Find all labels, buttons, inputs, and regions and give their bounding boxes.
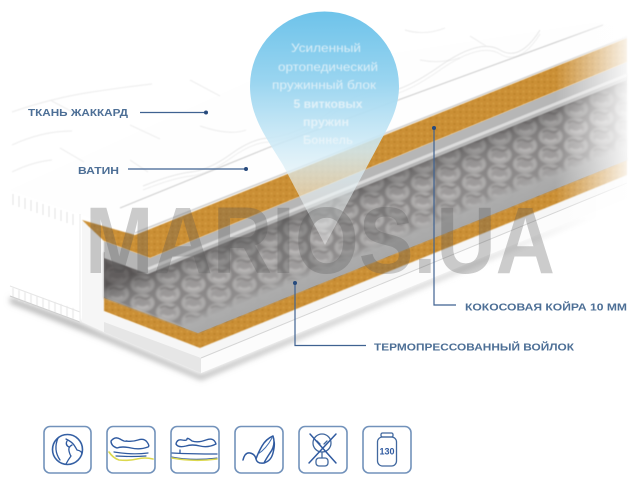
icon: 130 kg weight jar xyxy=(363,426,411,473)
label: felt: ТЕРМОПРЕССОВАННЫЙ ВОЙЛОК xyxy=(374,340,575,354)
lower white layer xyxy=(104,175,627,373)
label: batting: ВАТИН xyxy=(78,165,119,177)
icon: feather xyxy=(235,426,283,473)
mattress illustration xyxy=(10,20,640,380)
icon: body on soft mattress xyxy=(107,426,155,473)
label: fabric: ТКАНЬ ЖАККАРД xyxy=(28,107,129,119)
label: batting xyxy=(78,165,248,177)
callout balloon xyxy=(250,12,399,245)
left side of mattress xyxy=(10,192,104,332)
icon: globe xyxy=(44,426,91,473)
label: coconut coir xyxy=(432,126,627,314)
lower coir layer xyxy=(104,158,627,348)
icon: body on firm mattress xyxy=(171,426,219,473)
watermark: MARIOS.UA xyxy=(85,188,555,294)
upper coir layer xyxy=(82,38,627,258)
icon: 130 kg weight jar: 130 xyxy=(379,446,395,456)
balloon text: Боннель xyxy=(303,133,353,147)
balloon text: ортопедический xyxy=(278,60,378,74)
balloon text: 5 витковых xyxy=(294,97,363,111)
right edge fade xyxy=(555,20,640,220)
spring block xyxy=(104,74,627,333)
shadow under mattress xyxy=(10,210,600,380)
label: felt xyxy=(293,281,575,354)
balloon text: пружин xyxy=(303,115,349,129)
label: coconut coir: КОКОСОВАЯ КОЙРА 10 ММ xyxy=(465,300,627,314)
icon row xyxy=(44,426,411,473)
label: fabric xyxy=(28,107,208,119)
quilted top surface xyxy=(10,22,627,235)
icon: crossed-out dust mite xyxy=(299,426,347,473)
balloon text: Усиленный xyxy=(291,41,361,55)
balloon text xyxy=(272,41,378,147)
balloon text: пружинный блок xyxy=(272,78,377,92)
upper felt layer xyxy=(104,62,627,274)
